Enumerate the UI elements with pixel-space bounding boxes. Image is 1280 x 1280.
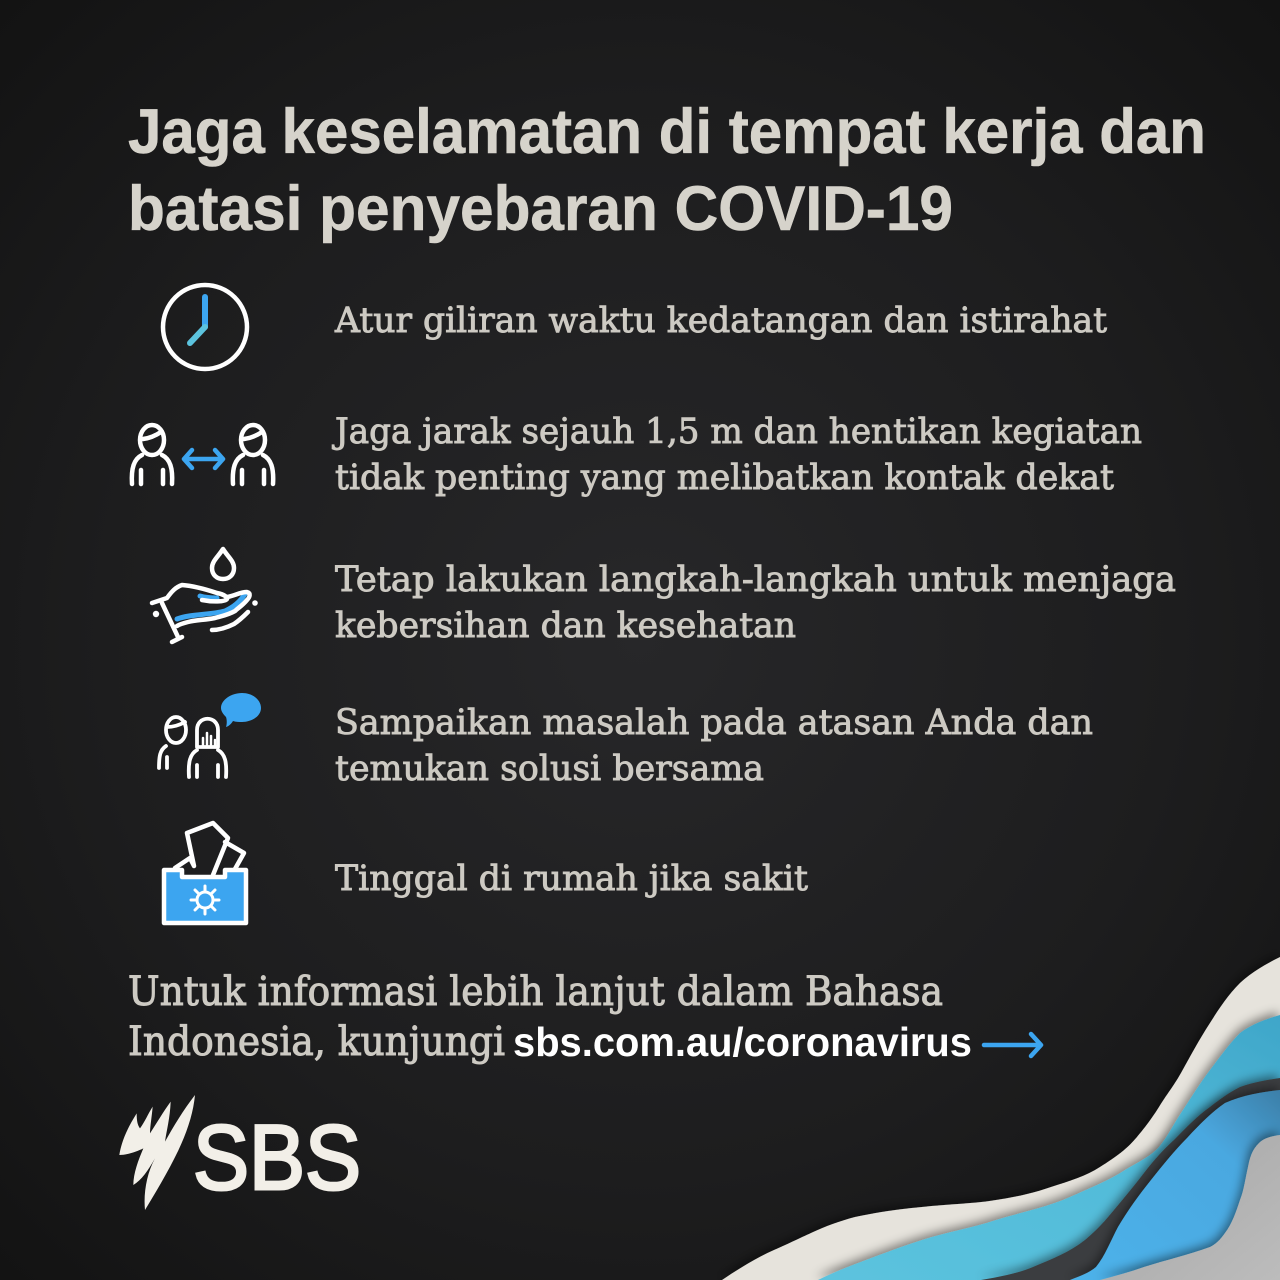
arrow — [984, 1034, 1041, 1056]
text: hygiene: kebersihan dan kesehatan — [335, 606, 796, 646]
footer text with link: Indonesia, kunjungi — [128, 1019, 505, 1065]
SBS logo: SBS — [193, 1107, 361, 1209]
text: physical distancing: Jaga jarak sejauh 1,5 m dan hentikan kegiatan — [332, 412, 1142, 452]
text: stay home if sick: Tinggal di rumah jika sakit — [335, 859, 808, 899]
text: hygiene — [335, 560, 1176, 646]
SBS logo — [119, 1095, 361, 1210]
text: hygiene: Tetap lakukan langkah-langkah untuk menjaga — [335, 560, 1176, 600]
title: Jaga keselamatan di tempat kerja dan — [128, 97, 1206, 167]
title: batasi penyebaran COVID-19 — [128, 174, 953, 244]
footer text with link: Untuk informasi lebih lanjut dalam Bahasa — [128, 969, 943, 1015]
footer text with link: sbs.com.au/coronavirus — [513, 1019, 972, 1065]
footer text with link — [128, 969, 972, 1065]
icon: hand and water drop — [152, 549, 258, 642]
icon: two people at a distance — [132, 425, 273, 484]
text: raise concerns: Sampaikan masalah pada atasan Anda dan — [335, 703, 1093, 743]
text: raise concerns — [335, 703, 1093, 789]
text: physical distancing — [332, 412, 1142, 498]
title — [128, 97, 1206, 244]
text: physical distancing: tidak penting yang melibatkan kontak dekat — [335, 458, 1114, 498]
icon: tissue box — [164, 823, 246, 923]
background waves — [722, 957, 1280, 1280]
icon: clock — [163, 285, 247, 369]
text: staggered times: Atur giliran waktu kedatangan dan istirahat — [334, 301, 1107, 341]
icon: two people talking with speech bubble — [159, 693, 261, 777]
text: raise concerns: temukan solusi bersama — [335, 749, 764, 789]
